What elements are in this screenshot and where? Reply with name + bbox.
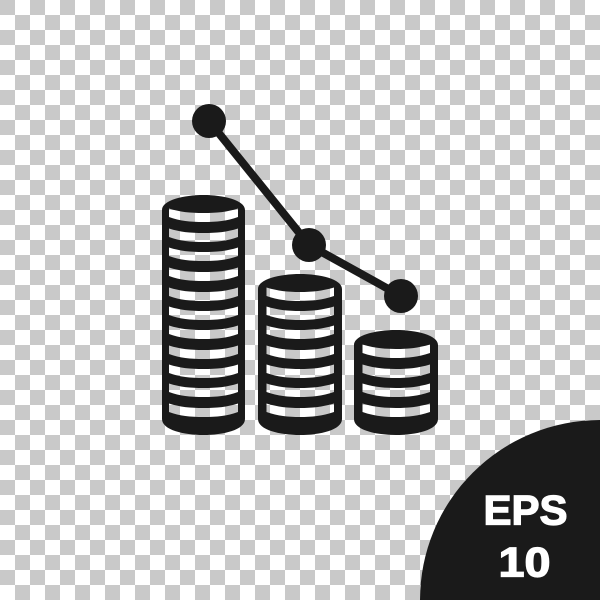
coin stack: medium xyxy=(258,274,342,435)
coin stack: short xyxy=(354,330,438,435)
trend point 2 xyxy=(292,228,326,262)
badge: EPS 10 xyxy=(420,420,600,600)
badge text: EPS: EPS xyxy=(484,486,568,533)
trend point 1 xyxy=(192,104,226,138)
coin stack: tall xyxy=(162,195,245,435)
trend point 3 xyxy=(384,279,418,313)
badge quarter circle xyxy=(420,420,600,600)
trend line xyxy=(209,121,401,296)
badge text: 10: 10 xyxy=(498,538,550,585)
icon: coin stacks with trend line xyxy=(162,104,438,435)
